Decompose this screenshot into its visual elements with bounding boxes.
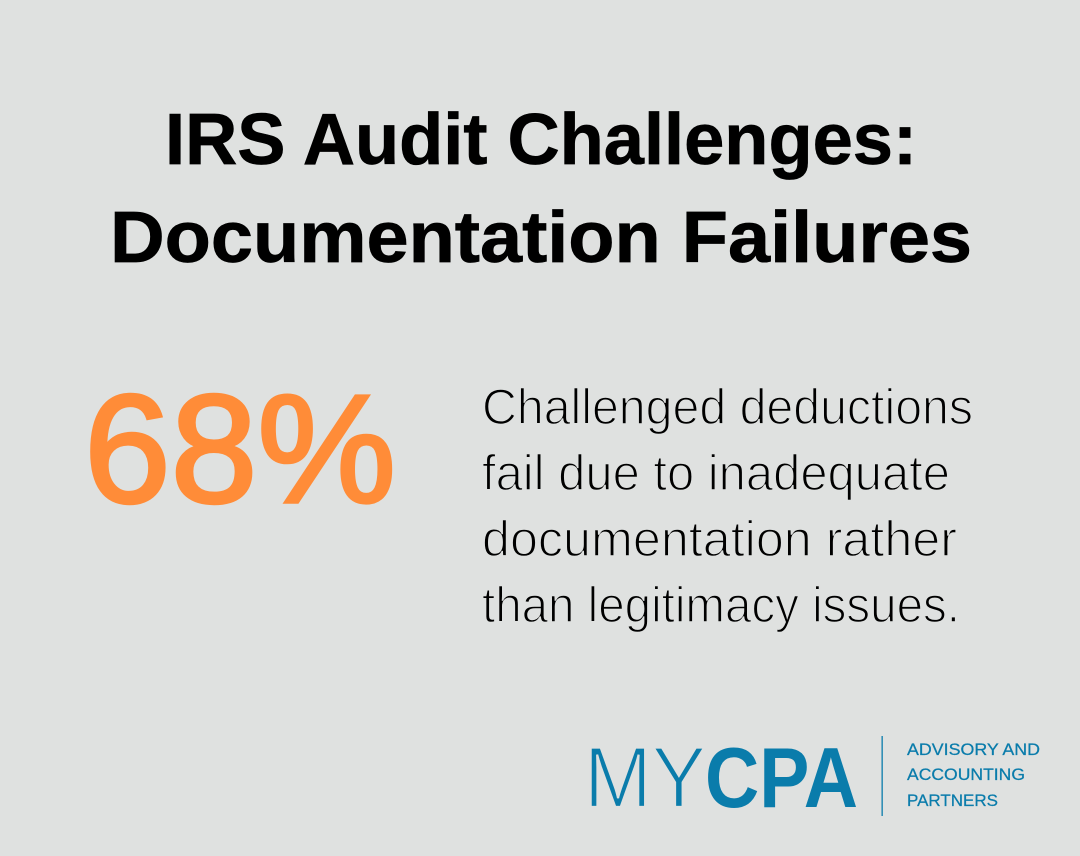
title: Documentation Failures [110, 198, 972, 278]
logo tagline: ADVISORY AND [907, 740, 1040, 759]
title [110, 100, 972, 278]
statistic description: than legitimacy issues. [482, 577, 960, 633]
logo tagline [907, 740, 1040, 810]
logo tagline: ACCOUNTING [907, 765, 1025, 784]
logo: MYCPA: CPA [705, 731, 858, 826]
logo: MYCPA: MY [584, 730, 706, 826]
statistic: 68%: 68% [84, 363, 396, 535]
statistic description: fail due to inadequate [482, 445, 950, 501]
title: IRS Audit Challenges: [165, 100, 917, 180]
statistic description: Challenged deductions [482, 379, 973, 435]
statistic description [482, 379, 973, 633]
statistic description: documentation rather [482, 511, 957, 567]
logo tagline: PARTNERS [907, 791, 998, 810]
logo: MYCPA [584, 730, 1040, 826]
